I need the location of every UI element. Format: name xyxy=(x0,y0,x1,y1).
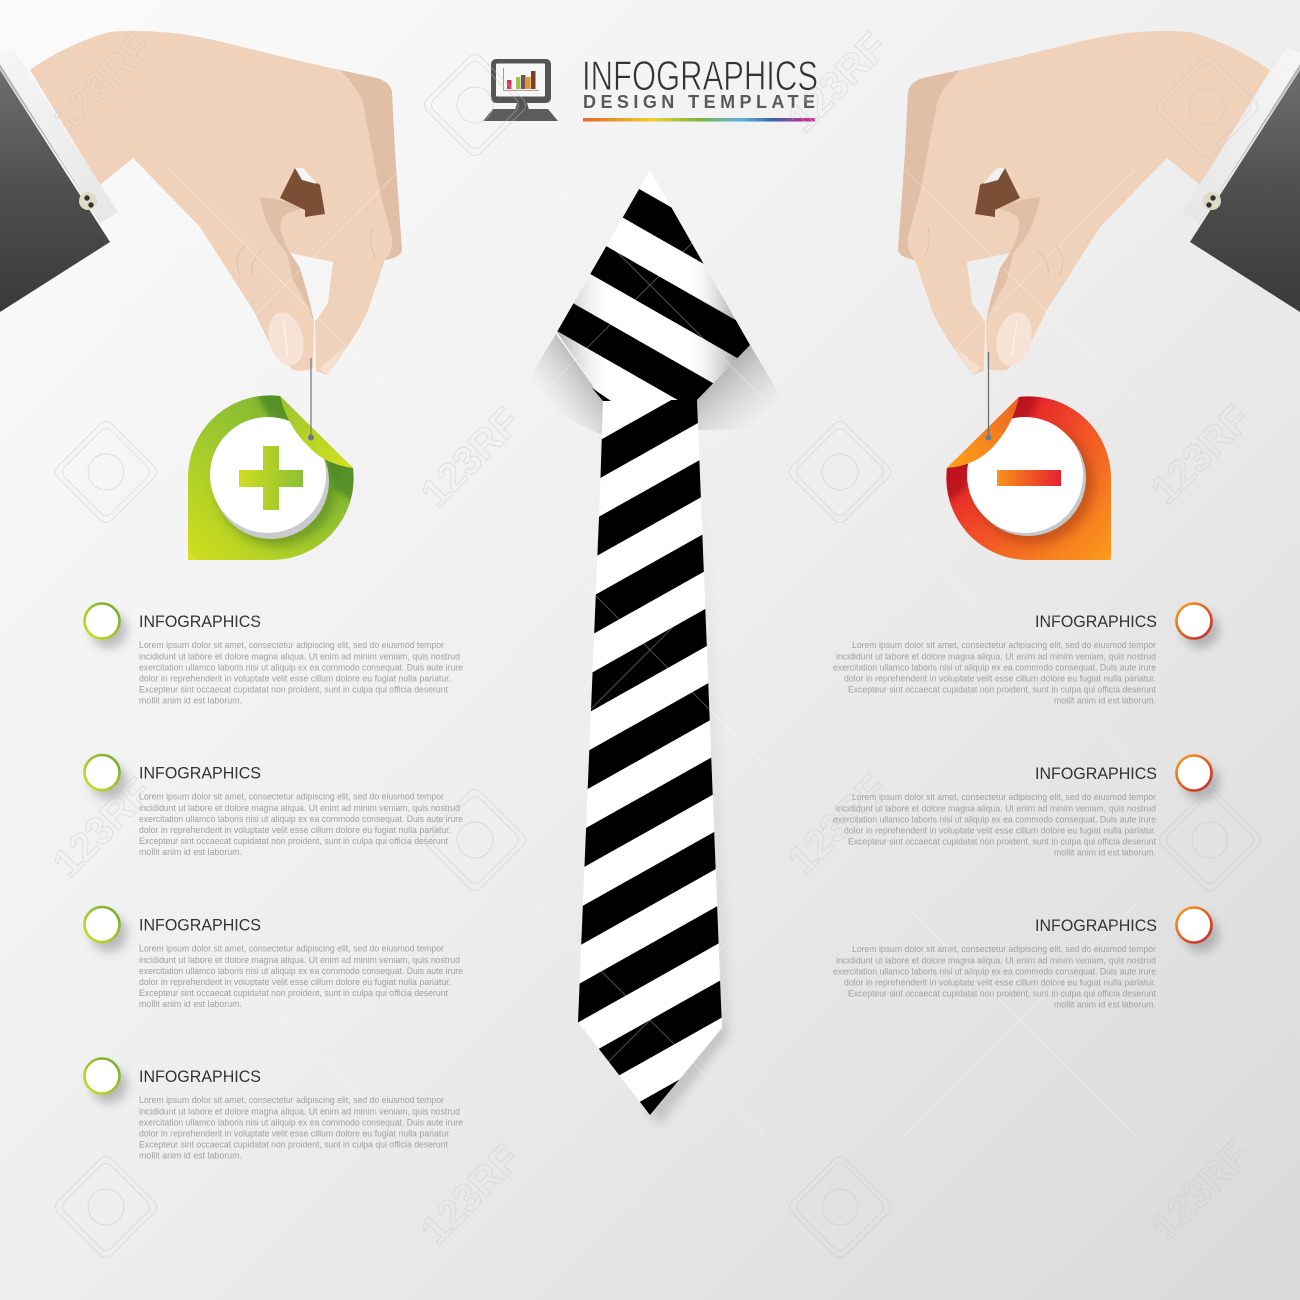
body text: incididunt ut labore et dolore magna aliqua. Ut enim ad minim veniam, quis nostrud xyxy=(139,1106,460,1116)
body text: incididunt ut labore et dolore magna aliqua. Ut enim ad minim veniam, quis nostrud xyxy=(836,954,1156,966)
right cuff button xyxy=(1203,192,1221,210)
heading: INFOGRAPHICS xyxy=(139,916,261,934)
right hand thumb shading xyxy=(986,197,1040,322)
left hand back shading xyxy=(340,70,402,260)
left knuckle crease xyxy=(237,228,376,275)
body text: exercitation ullamco laboris nisi ut aliquip ex ea commodo consequat. Duis aute irure xyxy=(833,662,1156,672)
left hand skin xyxy=(30,31,402,375)
right thumb nail xyxy=(991,309,1037,369)
right finger tip highlight xyxy=(955,347,980,375)
tie body shadow xyxy=(645,420,728,1125)
right nail highlight xyxy=(1012,320,1017,356)
body text: Excepteur sint occaecat cupidatat non proident, sunt in culpa qui officia deserunt xyxy=(848,988,1156,998)
bullet xyxy=(84,755,127,800)
body text xyxy=(139,1094,463,1160)
stock watermark overlay: 123RF xyxy=(45,770,161,886)
grey crescent xyxy=(213,423,329,539)
heading: INFOGRAPHICS xyxy=(1035,612,1157,631)
right hand with sleeve xyxy=(898,31,1300,375)
left nail highlight xyxy=(283,320,288,356)
stock watermark overlay: 123RF xyxy=(413,400,529,516)
white disc xyxy=(967,417,1083,533)
bullet xyxy=(1176,908,1219,952)
badge inner shadow xyxy=(217,392,358,546)
stock watermark overlay: 123RF xyxy=(1143,1133,1259,1249)
header xyxy=(483,52,818,122)
left finger tip highlight xyxy=(320,347,345,375)
left item 4 xyxy=(84,1058,463,1160)
body text: exercitation ullamco laboris nisi ut aliquip ex ea commodo consequat. Duis aute irure xyxy=(833,814,1156,824)
bullet xyxy=(84,604,127,648)
body text: Excepteur sint occaecat cupidatat non proident, sunt in culpa qui officia deserunt xyxy=(139,835,448,846)
body text: Lorem ipsum dolor sit amet, consectetur adipiscing elit, sed do eiusmod tempor xyxy=(139,942,444,954)
bullet xyxy=(84,907,127,952)
body text: dolor in reprehenderit in voluptate velit esse cillum dolore eu fugiat nulla pariatur. xyxy=(844,976,1156,988)
white disc xyxy=(210,417,326,533)
left hand with sleeve xyxy=(0,31,402,375)
peeled corner xyxy=(947,397,1019,468)
collar shadow left xyxy=(520,334,604,436)
right hand gap between fingers xyxy=(975,168,1020,217)
minus sign xyxy=(997,470,1061,486)
body text: exercitation ullamco laboris nisi ut aliquip ex ea commodo consequat. Duis aute irure xyxy=(139,1116,463,1128)
body text: mollit anim id est laborum. xyxy=(1054,846,1156,858)
body text: Excepteur sint occaecat cupidatat non proident, sunt in culpa qui officia deserunt xyxy=(848,836,1156,846)
body text xyxy=(139,790,463,857)
right item 1 xyxy=(833,604,1219,706)
body text: incididunt ut labore et dolore magna aliqua. Ut enim ad minim veniam, quis nostrud xyxy=(139,802,460,813)
right hand knuckle highlight xyxy=(983,168,1005,184)
right item 3 xyxy=(833,908,1219,1010)
body text xyxy=(833,639,1156,706)
tie knot xyxy=(557,170,750,400)
peeled corner xyxy=(280,396,353,468)
right item 2 xyxy=(833,756,1219,858)
left cuff button xyxy=(79,192,97,210)
left item 3 xyxy=(84,907,463,1009)
body text: exercitation ullamco laboris nisi ut aliquip ex ea commodo consequat. Duis aute irure xyxy=(139,662,463,672)
heading: INFOGRAPHICS xyxy=(139,1067,261,1086)
left hand thumb shading xyxy=(260,197,314,322)
body text: Lorem ipsum dolor sit amet, consectetur adipiscing elit, sed do eiusmod tempor xyxy=(852,791,1156,802)
left thumb nail xyxy=(263,309,309,369)
grey crescent xyxy=(970,420,1086,536)
body text: dolor in reprehenderit in voluptate velit esse cillum dolore eu fugiat nulla pariatur. xyxy=(844,672,1156,684)
knot lower notch xyxy=(592,388,611,401)
left hand knuckle highlight xyxy=(295,168,317,184)
body text: exercitation ullamco laboris nisi ut aliquip ex ea commodo consequat. Duis aute irure xyxy=(139,813,463,824)
body text: exercitation ullamco laboris nisi ut aliquip ex ea commodo consequat. Duis aute irure xyxy=(833,966,1156,976)
body text xyxy=(833,791,1156,858)
heading: INFOGRAPHICS xyxy=(1035,764,1157,783)
left hand gap between fingers xyxy=(280,168,325,217)
left cuff edge xyxy=(0,64,103,226)
rainbow rule xyxy=(583,118,815,122)
positive badge xyxy=(188,392,358,560)
plus sign xyxy=(239,446,303,510)
stock watermark overlay: 123RF xyxy=(45,25,161,141)
subtitle: DESIGN TEMPLATE xyxy=(583,92,815,112)
right hand back shading xyxy=(898,70,960,260)
body text xyxy=(139,639,463,706)
red teardrop xyxy=(946,396,1111,560)
badge inner shadow xyxy=(942,392,1094,544)
body text: Lorem ipsum dolor sit amet, consectetur adipiscing elit, sed do eiusmod tempor xyxy=(852,639,1156,650)
left hanging thread xyxy=(308,358,314,440)
icon: monitor with bar chart xyxy=(483,59,558,121)
body text: dolor in reprehenderit in voluptate velit esse cillum dolore eu fugiat nulla pariatur. xyxy=(139,976,451,987)
body text: Excepteur sint occaecat cupidatat non proident, sunt in culpa qui officia deserunt xyxy=(139,684,448,694)
collar shadow right xyxy=(696,345,800,430)
body text: mollit anim id est laborum. xyxy=(1054,694,1156,706)
right cuff edge xyxy=(1197,64,1300,226)
heading: INFOGRAPHICS xyxy=(139,612,261,631)
body text: dolor in reprehenderit in voluptate velit esse cillum dolore eu fugiat nulla pariatur. xyxy=(139,1128,451,1138)
body text: incididunt ut labore et dolore magna aliqua. Ut enim ad minim veniam, quis nostrud xyxy=(139,954,460,965)
heading: INFOGRAPHICS xyxy=(139,764,261,782)
stock watermark overlay: 123RF xyxy=(413,1137,529,1253)
body text: dolor in reprehenderit in voluptate velit esse cillum dolore eu fugiat nulla pariatur. xyxy=(844,824,1156,836)
body text: Lorem ipsum dolor sit amet, consectetur adipiscing elit, sed do eiusmod tempor xyxy=(139,639,444,650)
heading: INFOGRAPHICS xyxy=(1035,916,1157,935)
body text: Excepteur sint occaecat cupidatat non proident, sunt in culpa qui officia deserunt xyxy=(848,684,1156,694)
left cuff xyxy=(0,48,118,223)
body text: mollit anim id est laborum. xyxy=(139,998,242,1009)
body text: dolor in reprehenderit in voluptate velit esse cillum dolore eu fugiat nulla pariatur. xyxy=(139,672,451,684)
bullet xyxy=(1176,756,1219,800)
stock watermark overlay: 123RF xyxy=(780,25,896,141)
body text: Excepteur sint occaecat cupidatat non proident, sunt in culpa qui officia deserunt xyxy=(139,1138,448,1150)
body text: mollit anim id est laborum. xyxy=(139,694,242,706)
title: INFOGRAPHICS xyxy=(582,52,818,99)
body text: mollit anim id est laborum. xyxy=(139,1150,242,1160)
stock watermark overlay: 123RF xyxy=(1143,397,1259,513)
body text: Excepteur sint occaecat cupidatat non proident, sunt in culpa qui officia deserunt xyxy=(139,987,448,998)
left sleeve xyxy=(0,70,110,312)
stock watermark overlay: 123RF xyxy=(780,767,896,883)
bullet xyxy=(84,1058,127,1103)
tie body xyxy=(578,400,722,1115)
body text: Lorem ipsum dolor sit amet, consectetur adipiscing elit, sed do eiusmod tempor xyxy=(139,1094,444,1105)
green teardrop xyxy=(188,395,354,560)
necktie arrow xyxy=(520,138,800,1179)
right sleeve xyxy=(1190,70,1300,312)
right hand skin xyxy=(898,31,1270,375)
body text: dolor in reprehenderit in voluptate velit esse cillum dolore eu fugiat nulla pariatur. xyxy=(139,824,451,835)
body text: incididunt ut labore et dolore magna aliqua. Ut enim ad minim veniam, quis nostrud xyxy=(836,650,1156,662)
body text: Lorem ipsum dolor sit amet, consectetur adipiscing elit, sed do eiusmod tempor xyxy=(139,790,444,802)
body text: exercitation ullamco laboris nisi ut aliquip ex ea commodo consequat. Duis aute irure xyxy=(139,965,463,976)
right knuckle crease xyxy=(924,228,1063,275)
body text xyxy=(833,943,1156,1010)
body text: incididunt ut labore et dolore magna aliqua. Ut enim ad minim veniam, quis nostrud xyxy=(139,650,460,662)
body text: Lorem ipsum dolor sit amet, consectetur adipiscing elit, sed do eiusmod tempor xyxy=(852,943,1156,954)
right cuff xyxy=(1182,48,1300,223)
body text: mollit anim id est laborum. xyxy=(1054,998,1156,1010)
negative badge xyxy=(942,392,1111,560)
bullet xyxy=(1176,604,1219,648)
body text: incididunt ut labore et dolore magna aliqua. Ut enim ad minim veniam, quis nostrud xyxy=(836,802,1156,814)
body text: mollit anim id est laborum. xyxy=(139,846,242,857)
right hanging thread xyxy=(986,352,992,440)
left item 1 xyxy=(84,604,463,706)
left item 2 xyxy=(84,755,463,857)
body text xyxy=(139,942,463,1009)
